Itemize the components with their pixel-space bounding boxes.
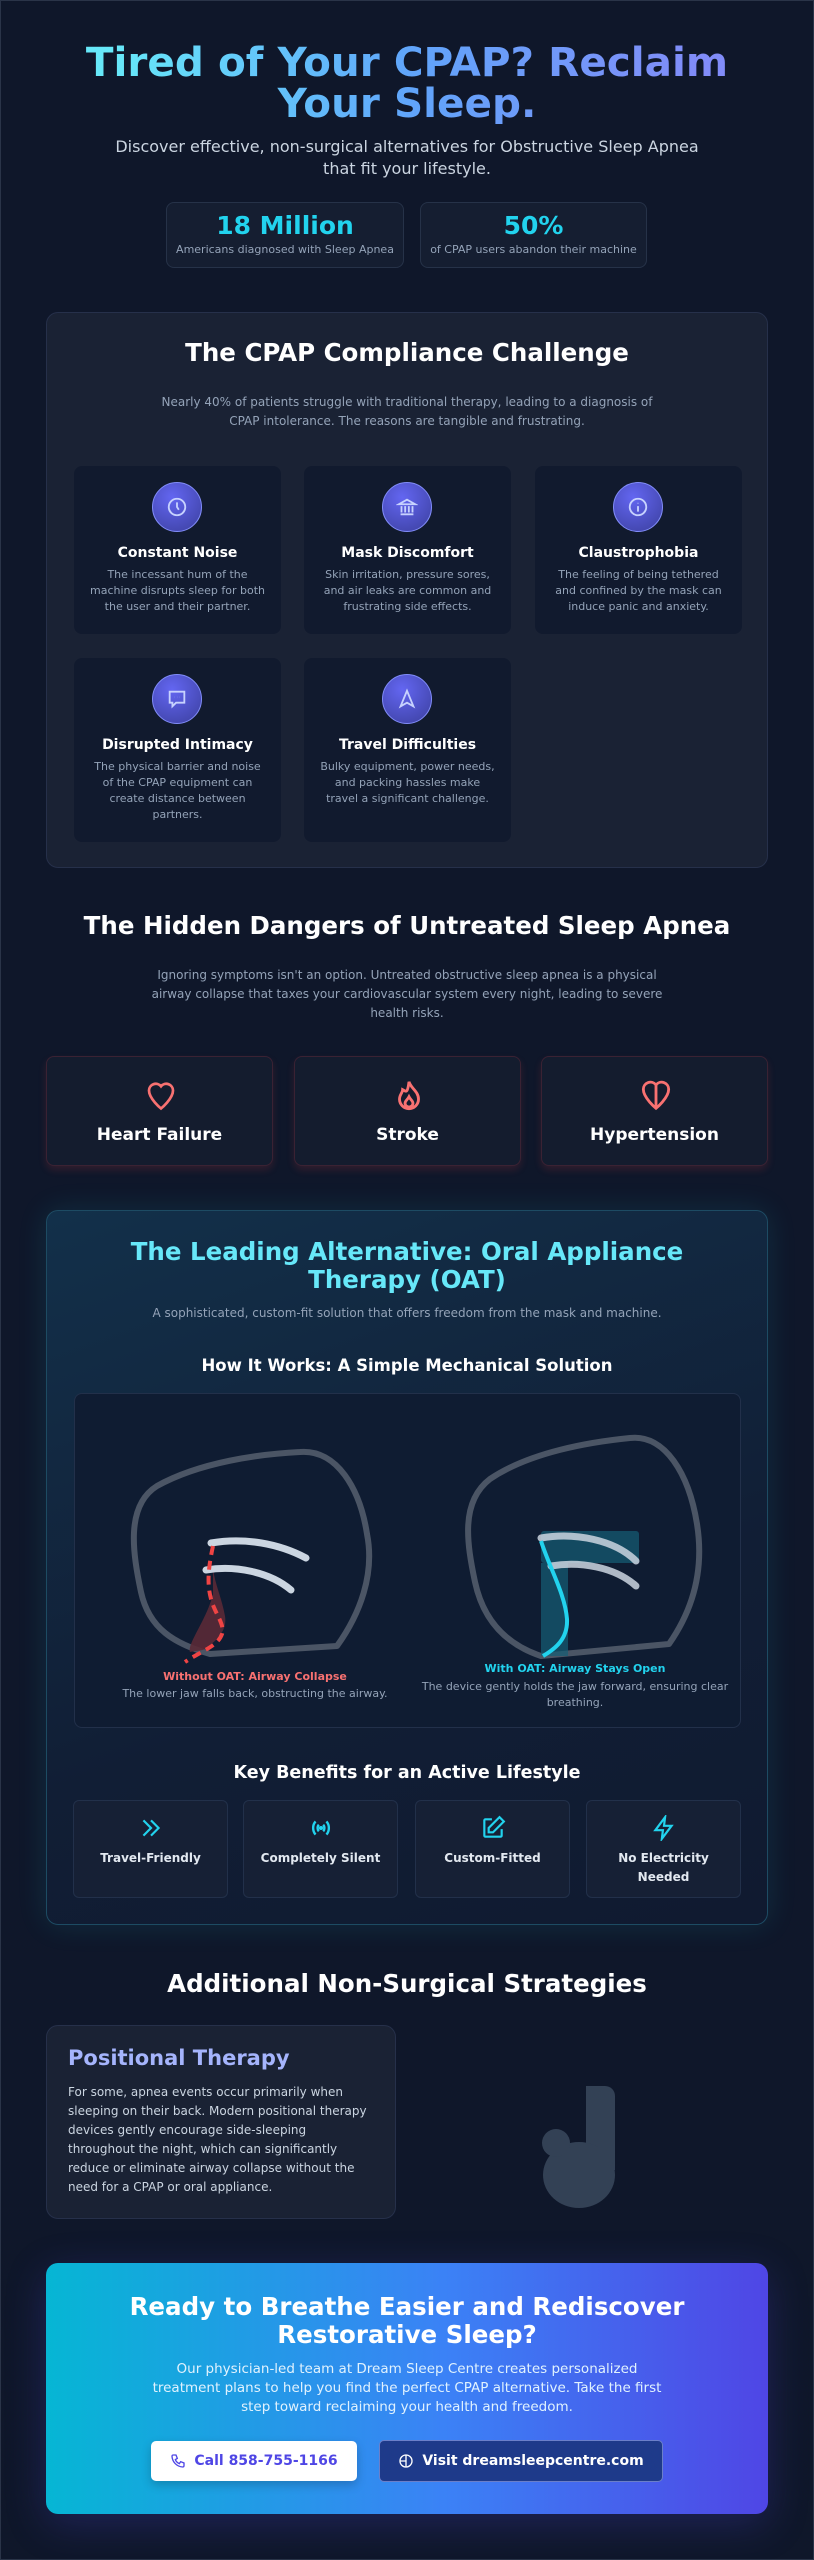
stat: 18 million: Americans diagnosed with Sleep Apnea [176, 243, 394, 256]
card: travel difficulties: Travel Difficulties [339, 737, 476, 753]
danger: hypertension [541, 1056, 768, 1166]
diagram: airway illustrations [130, 1434, 702, 1664]
title: Your Sleep. [278, 79, 536, 127]
icon: flame [398, 1081, 420, 1110]
card: travel difficulties: Bulky equipment, power needs, and packing hassles make travel a significant challenge. [320, 760, 495, 805]
panel: call to action [46, 2263, 768, 2514]
key benefits heading: Key Benefits for an Active Lifestyle [233, 1763, 581, 1783]
benefit: no electricity: Needed [638, 1870, 689, 1884]
benefit: no electricity: No Electricity [618, 1851, 709, 1865]
dangers intro: Ignoring symptoms isn't an option. Untreated obstructive sleep apnea is a physical airway collapse that taxes your cardiovascular system every night, leading to severe health risks. [152, 968, 662, 1020]
benefit: custom fitted: Custom-Fitted [444, 1851, 541, 1865]
card: travel difficulties [304, 658, 511, 842]
benefit: custom fitted [415, 1800, 570, 1898]
heading: hidden dangers: The Hidden Dangers of Untreated Sleep Apnea [84, 911, 730, 940]
benefit: no electricity [586, 1800, 741, 1898]
icon: navigation [382, 674, 432, 724]
positional text: sleeping on their back. Modern positional therapy [68, 2104, 367, 2118]
heading: The CPAP Compliance Challenge [185, 338, 629, 367]
OAT title [130, 1237, 683, 1294]
stat: 50%: of CPAP users abandon their machine [430, 243, 637, 256]
danger: stroke [294, 1056, 521, 1166]
card: constant noise: Constant Noise [118, 545, 237, 561]
stat: 50% [420, 202, 647, 268]
benefit: travel friendly: Travel-Friendly [100, 1851, 201, 1865]
stat: 18 million: 18 Million [216, 211, 354, 240]
card: disrupted intimacy: Disrupted Intimacy [102, 737, 253, 753]
icon: edit [483, 1816, 506, 1838]
positional text: For some, apnea events occur primarily when [68, 2085, 343, 2099]
CTA heading: Ready to Breathe Easier and Rediscover [130, 2292, 684, 2321]
OAT subtitle: A sophisticated, custom-fit solution that offers freedom from the mask and machine. [152, 1306, 662, 1320]
icon: lightning [653, 1815, 674, 1841]
positional title: Positional Therapy [68, 2046, 290, 2070]
icon: side sleeper [542, 2086, 615, 2208]
danger: heart failure: Heart Failure [97, 1125, 222, 1145]
intro text: Nearly 40% of patients struggle with traditional therapy, leading to a diagnosis of CPAP intolerance. The reasons are tangible and frustrating. [161, 395, 652, 428]
card: mask discomfort: Skin irritation, pressure sores, and air leaks are common and frustrating side effects. [324, 568, 491, 613]
card: constant noise: The incessant hum of the machine disrupts sleep for both the user and their partner. [90, 568, 265, 613]
benefit: travel friendly [73, 1800, 228, 1898]
benefit: silent [243, 1800, 398, 1898]
card: claustrophobia [535, 466, 742, 634]
title: Tired of Your CPAP? Reclaim [86, 38, 728, 86]
subtitle: Discover effective, non-surgical alternatives for Obstructive Sleep Apnea that fit your lifestyle. [115, 137, 699, 178]
panel: oral appliance therapy [46, 1210, 768, 1925]
icon: heart [148, 1082, 174, 1110]
card: disrupted intimacy [74, 658, 281, 842]
icon: split heart [642, 1080, 670, 1110]
panel: CPAP compliance challenge [46, 312, 768, 868]
positional text: need for a CPAP or oral appliance. [68, 2180, 272, 2194]
card: mask discomfort: Mask Discomfort [341, 545, 474, 561]
icon: building [382, 482, 432, 532]
danger: hypertension: Hypertension [590, 1125, 719, 1145]
button: call: Call 858-755-1166 [194, 2453, 338, 2469]
OAT title: Therapy (OAT) [308, 1265, 506, 1294]
desc: without OAT: The lower jaw falls back, obstructing the airway. [122, 1687, 388, 1700]
danger: stroke: Stroke [376, 1125, 439, 1145]
danger: heart failure [46, 1056, 273, 1166]
card: disrupted intimacy: The physical barrier and noise of the CPAP equipment can create distance between partners. [94, 760, 261, 821]
title [40, 42, 774, 124]
button: call [151, 2441, 357, 2481]
icon: chevrons [142, 1820, 160, 1836]
icon: info [613, 482, 663, 532]
positional text: devices gently encourage side-sleeping [68, 2123, 306, 2137]
label: without OAT: Without OAT: Airway Collapse [163, 1670, 347, 1683]
how it works heading: How It Works: A Simple Mechanical Solution [201, 1356, 612, 1375]
icon: broadcast [312, 1820, 330, 1836]
OAT title: The Leading Alternative: Oral Appliance [131, 1237, 683, 1266]
diagram panel [74, 1393, 741, 1728]
icon: chat [152, 674, 202, 724]
CTA heading [130, 2292, 684, 2349]
panel: positional therapy [46, 2025, 396, 2219]
button: website: Visit dreamsleepcentre.com [422, 2453, 644, 2469]
stat: 18 million [166, 202, 404, 268]
heading: additional strategies: Additional Non-Surgical Strategies [167, 1969, 647, 1998]
card: claustrophobia: Claustrophobia [579, 545, 698, 561]
card: claustrophobia: The feeling of being tethered and confined by the mask can induce panic and anxiety. [555, 568, 722, 613]
CTA heading: Restorative Sleep? [277, 2320, 537, 2349]
button: website [379, 2440, 663, 2482]
positional text: throughout the night, which can significantly [68, 2142, 337, 2156]
label: with OAT: With OAT: Airway Stays Open [485, 1662, 665, 1675]
positional text: reduce or eliminate airway collapse without the [68, 2161, 354, 2175]
card: mask discomfort [304, 466, 511, 634]
icon: clock [152, 482, 202, 532]
desc: with OAT: The device gently holds the jaw forward, ensuring clear breathing. [422, 1680, 728, 1709]
benefit: silent: Completely Silent [261, 1851, 380, 1865]
CTA text: Our physician-led team at Dream Sleep Centre creates personalized treatment plans to help you find the perfect CPAP alternative. Take the first step toward reclaiming your health and freedom. [153, 2361, 661, 2415]
stat: 50%: 50% [504, 211, 563, 240]
positional text [68, 2085, 367, 2194]
card: constant noise [74, 466, 281, 634]
